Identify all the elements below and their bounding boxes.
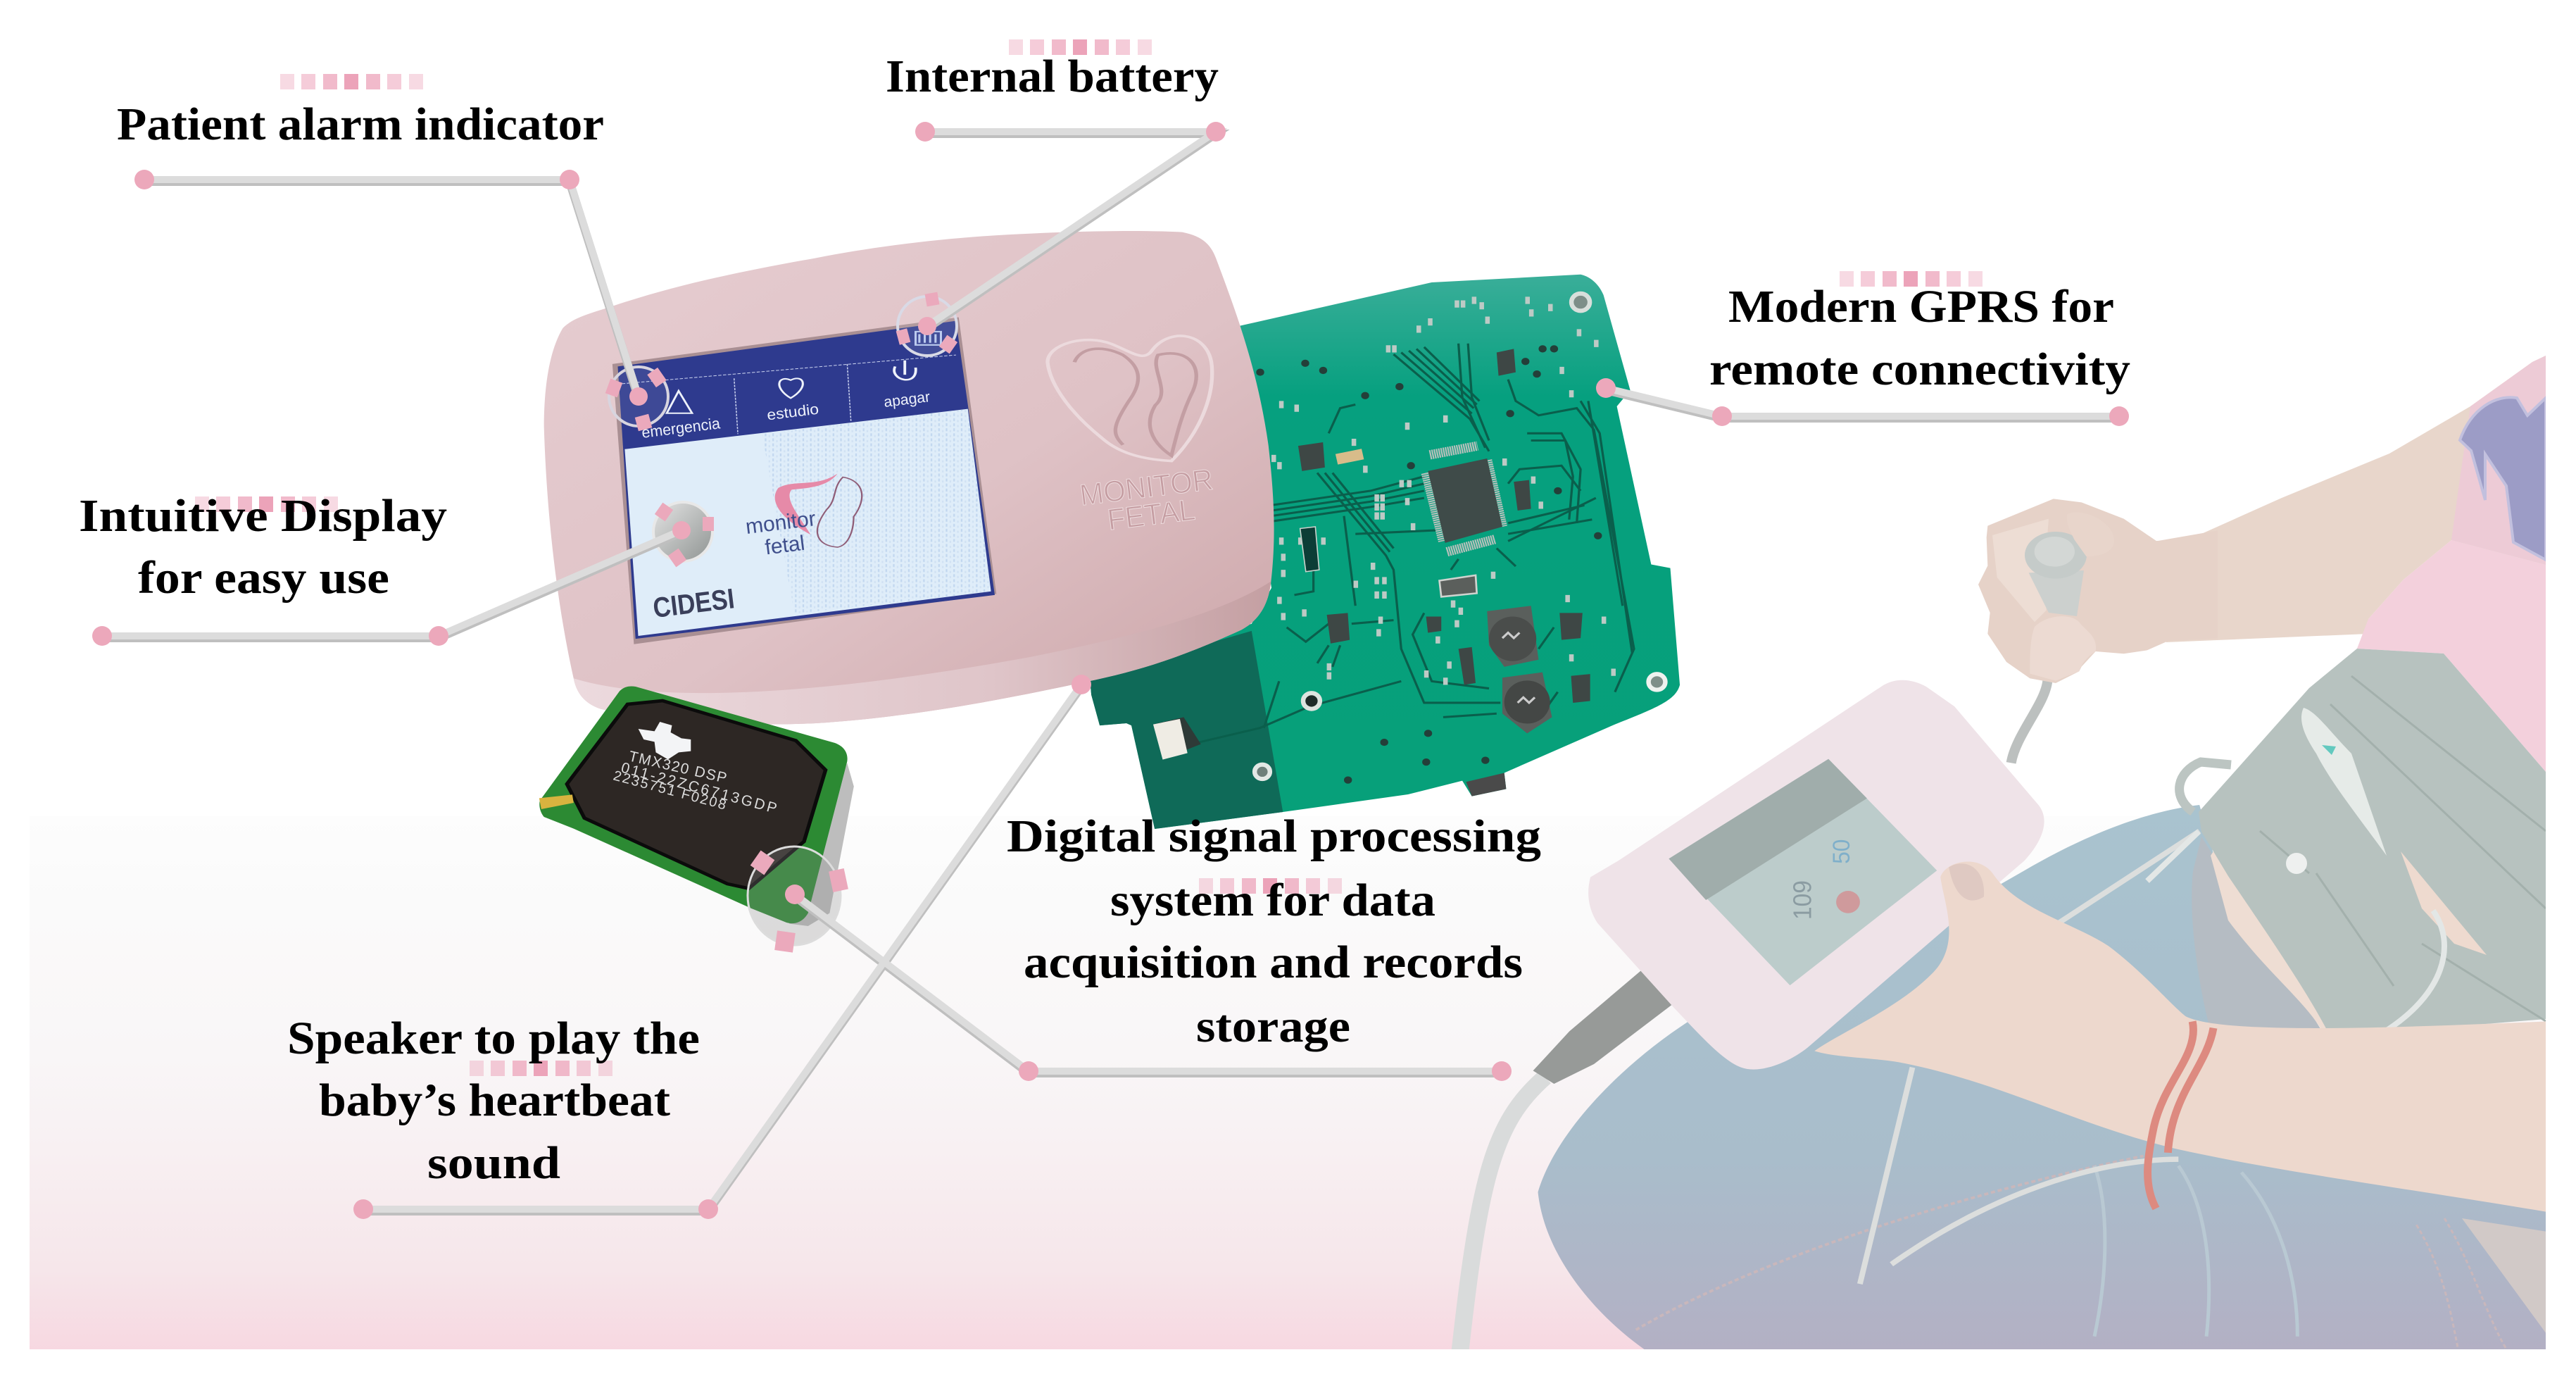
PCB circuit board [1090, 275, 1680, 829]
chip body [567, 701, 826, 889]
icon: warning [667, 391, 692, 413]
callout rings [609, 296, 957, 945]
ring: battery [898, 296, 957, 356]
chip shadow [789, 763, 854, 926]
screen blue [617, 321, 995, 639]
component pads [1271, 301, 1616, 681]
photo: belly [2211, 851, 2326, 1028]
DSP chip [539, 687, 854, 926]
photo: seat patch [2462, 1218, 2546, 1333]
embossed logo [1048, 336, 1212, 461]
squares: DSP [1199, 878, 1342, 894]
photo: monitor body [1588, 680, 2044, 1070]
label: Digital signal processing system: storage [1196, 1001, 1350, 1052]
label: Intuitive Display for easy use: for easy use [138, 552, 389, 604]
screen text: CIDESI: CIDESI [651, 583, 736, 624]
label: Modern GPRS for remote connectivity: remote connectivity [1709, 344, 2130, 395]
photo: monitor screen [1669, 759, 1937, 985]
fetal monitor device: fetal [764, 532, 806, 559]
photo: thumb nail [1949, 863, 1984, 901]
photo: shirt [2357, 540, 2546, 772]
screen logo [775, 473, 862, 547]
chip text: TMX320 DSP [627, 748, 728, 787]
squares: speaker [470, 1061, 612, 1076]
pin-one mark [539, 794, 574, 809]
line: patient alarm [144, 180, 639, 396]
label: Speaker to play the baby's heartbeat sound: sound [427, 1137, 560, 1189]
squares: GPRS [1840, 271, 1983, 287]
photo: probe cap [2025, 532, 2087, 579]
fetal monitor device: FETAL [1105, 493, 1197, 537]
photo: wires [1860, 831, 2199, 1284]
photo: belt clip [2286, 853, 2307, 874]
photo: cable plug [1533, 969, 1676, 1084]
line: internal battery [925, 132, 1216, 326]
label: Digital signal processing system: system for data [1110, 875, 1435, 926]
label: Speaker to play the baby's heartbeat sound: Speaker to play the [287, 1013, 700, 1064]
photo: sleeve print [2460, 397, 2546, 560]
TI logo [639, 722, 691, 759]
photo: fist with probe [1978, 499, 2218, 763]
black component [1300, 527, 1319, 572]
photo: upper arm [2140, 356, 2546, 642]
line: DSP [795, 894, 1502, 1071]
photo: dark waist band [2192, 837, 2325, 1037]
label: Speaker to play the baby's heartbeat sound: baby’s heartbeat [319, 1075, 670, 1126]
photo: belt [2199, 649, 2546, 1037]
pink square decorations [195, 39, 1983, 1076]
photo: belt gap white [2301, 708, 2387, 856]
chip text: 2235751 F0208 [612, 768, 728, 813]
small chips [1298, 349, 1590, 703]
screen text: apagar: apagar [883, 389, 931, 411]
photo: thumb [2067, 512, 2114, 556]
photo: belt gap skin [2401, 851, 2487, 955]
photo: probe body [2029, 570, 2084, 616]
icon: study heart [779, 378, 803, 398]
label: Intuitive Display for easy use [79, 490, 447, 604]
screen bezel [612, 318, 996, 644]
ring: display [653, 502, 712, 561]
label: Modern GPRS for remote connectivity: Modern GPRS for [1728, 281, 2114, 332]
device shell [544, 231, 1274, 725]
icon: power [894, 361, 916, 380]
leader lines [102, 132, 2119, 1209]
photo: jeans pocket seam [2416, 1218, 2508, 1351]
photo: probe cable [2011, 681, 2047, 763]
label: Digital signal processing system: Digital signal processing [1007, 811, 1541, 862]
photo: jeans [1538, 805, 2546, 1351]
squares: intuitive display [195, 496, 338, 512]
photo: belt wires [2147, 832, 2444, 1032]
screen text: monitor fetal: monitor [744, 507, 817, 539]
header dividers [622, 355, 956, 434]
leader line dots [92, 122, 2129, 1219]
photo: belt seams [2260, 676, 2546, 1021]
dark board section [1090, 631, 1283, 829]
traces [1199, 344, 1634, 742]
leader line shadows [102, 134, 2119, 1211]
device lower rim [574, 582, 1271, 725]
capacitor [1440, 575, 1477, 596]
label: Modern GPRS for remote connectivity [1709, 281, 2130, 395]
photo: belt loop [2180, 762, 2231, 812]
photo: patient using the monitor [1457, 356, 2546, 1376]
board outline [1090, 275, 1680, 829]
icon: battery [916, 332, 941, 345]
squares: patient alarm [280, 74, 423, 89]
photo: sleeve [2451, 356, 2546, 565]
label: Speaker to play the baby's heartbeat sound [287, 1013, 700, 1189]
main processor [1426, 446, 1502, 552]
label: Digital signal processing system: acquisition and records [1024, 937, 1523, 988]
chip text: 011-22ZC6713GDP [620, 760, 779, 817]
label: Digital signal processing system [1007, 811, 1541, 1052]
bottom connector [1466, 773, 1506, 796]
line: speaker [363, 685, 1081, 1209]
photo: handheld monitor [1588, 680, 2546, 1212]
label: Patient alarm indicator: Patient alarm indicator [117, 99, 604, 150]
photo: holding hand [1814, 862, 2546, 1212]
fetal monitor device [544, 231, 1274, 725]
chip substrate [539, 687, 848, 923]
label: Intuitive Display for easy use: Intuitive Display [79, 490, 447, 542]
screen light area [624, 409, 991, 636]
screen text: estudio: estudio [766, 401, 819, 423]
background gradient panel [30, 816, 2546, 1349]
photo: knuckle highlight [1992, 519, 2049, 622]
photo: lower fingers [2030, 616, 2096, 681]
ring: chip [748, 846, 841, 945]
screen text: emergencia: emergencia [641, 414, 722, 442]
photo: bracelet [2148, 1021, 2213, 1208]
ring: alarm [609, 367, 668, 426]
inductors [1487, 606, 1552, 733]
callout ring markers [605, 292, 957, 953]
photo: main cable [1457, 1077, 1545, 1376]
mounting holes [1255, 294, 1665, 779]
squares: internal battery [1009, 39, 1152, 55]
photo: screen reading: 109 [1789, 880, 1817, 920]
photo: screen header [1669, 759, 1867, 900]
line: intuitive display [102, 530, 681, 636]
photo: fist [1978, 499, 2218, 683]
photo: jeans folds [2094, 1166, 2297, 1337]
photo: jeans seam [1636, 1156, 2144, 1330]
gold component [1336, 449, 1364, 465]
photo: handheld monitor: 50 [1828, 839, 1854, 864]
label: Internal battery: Internal battery [886, 51, 1219, 102]
embossed text: MONITOR FETAL: MONITOR [1078, 463, 1214, 512]
line: GPRS [1606, 388, 2119, 416]
photo: teal tag [2322, 745, 2336, 755]
via dots [1260, 349, 1598, 780]
push button [1153, 717, 1201, 760]
